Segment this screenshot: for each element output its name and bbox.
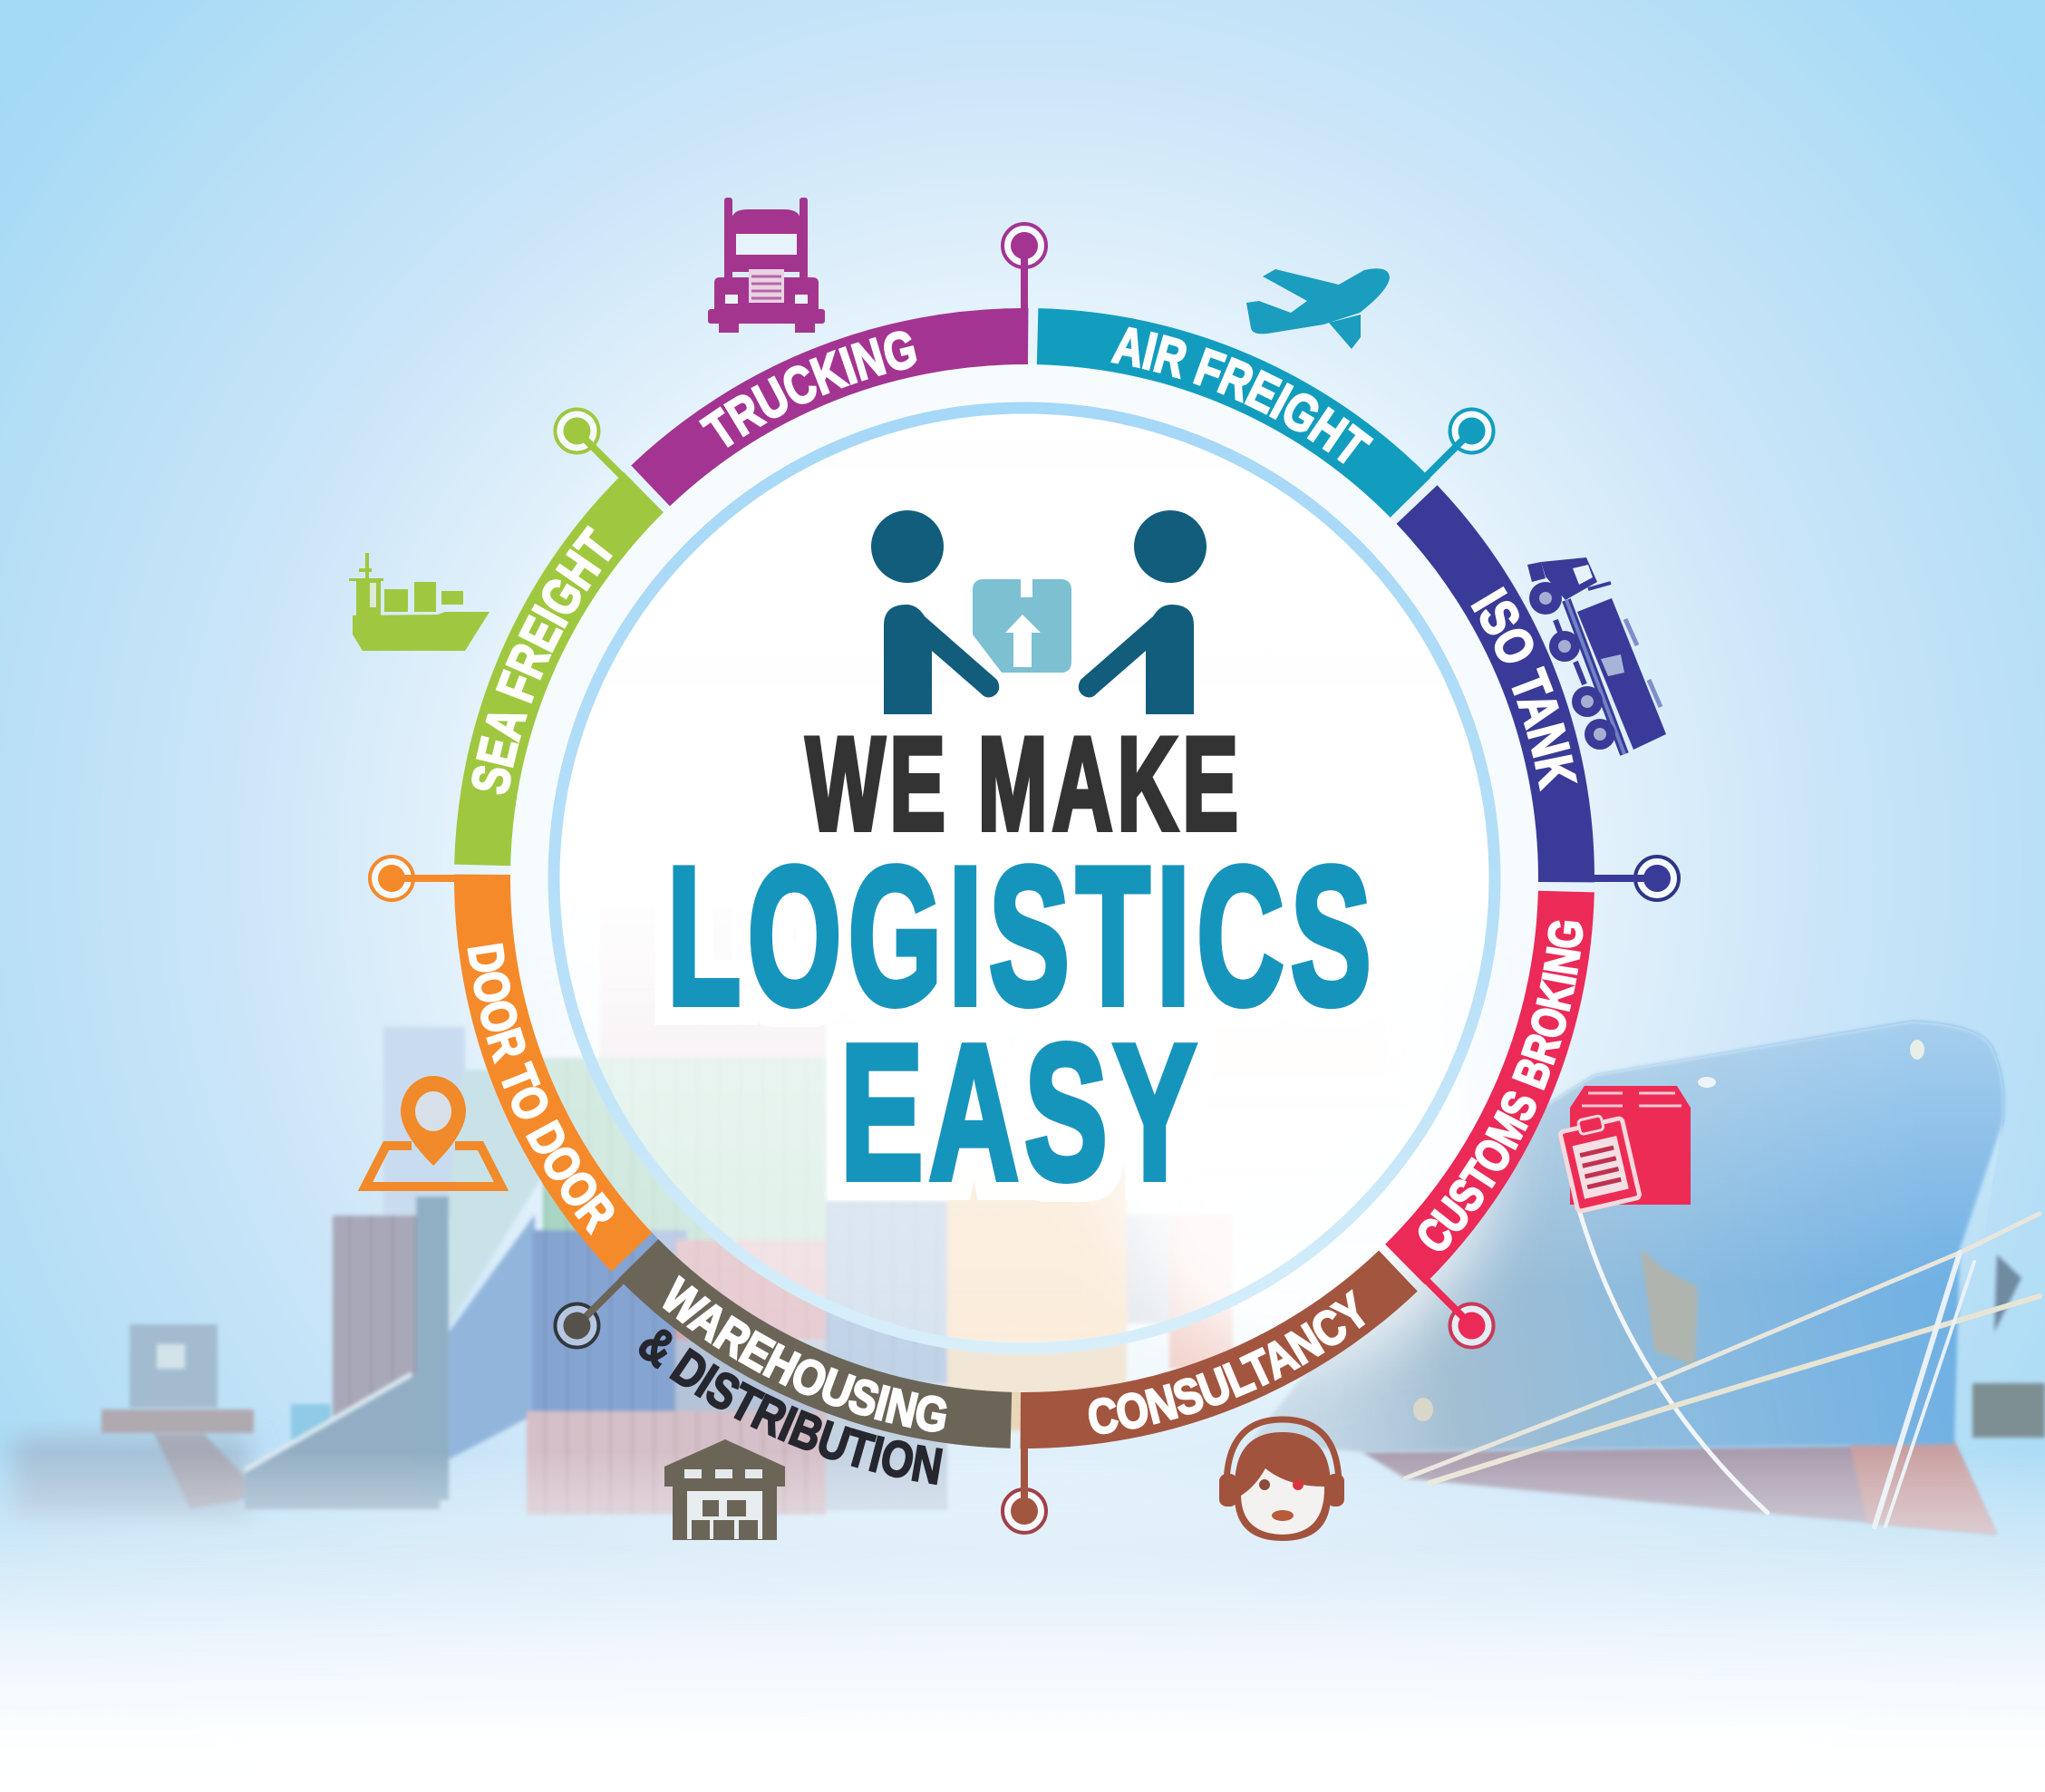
title: logistics: LOGISTICS [667, 826, 1378, 1045]
icon: warehouse [664, 1439, 785, 1540]
pin: sea freight [546, 400, 638, 492]
title: easy: EASY [840, 1004, 1202, 1219]
pin: customs broking [1410, 1264, 1503, 1357]
connector pins [370, 224, 1679, 1533]
segment: trucking [631, 190, 1056, 612]
pale glare beside the ring [1115, 943, 1496, 1360]
parcel [973, 579, 1071, 673]
icon: headset agent [1219, 1419, 1344, 1541]
pin: air freight [1410, 400, 1503, 492]
logo: two people handing a parcel [871, 510, 1207, 714]
segment: customs broking [1384, 888, 1594, 1287]
segment: iso tank [1291, 485, 1712, 910]
segment: sea freight [454, 470, 664, 868]
label: air freight: AIR FREIGHT [1110, 326, 1374, 464]
left person [871, 510, 999, 714]
segment: warehousing [615, 1238, 1014, 1448]
right person [1079, 510, 1207, 714]
icon: map pin [365, 1076, 501, 1187]
title: we make: WE MAKE [806, 710, 1243, 857]
label: door to door: DOOR TO DOOR [468, 943, 615, 1236]
segment: air freight [1034, 308, 1433, 518]
icon: airplane [1246, 268, 1390, 349]
pin: iso tank [1593, 857, 1679, 900]
icon: customs box and clipboard [1558, 1086, 1691, 1212]
segment labels [468, 326, 1583, 1485]
segment: consultancy [993, 1145, 1418, 1566]
icon: container ship [349, 553, 489, 651]
ship hull [1115, 943, 2045, 1535]
left machinery [14, 1324, 331, 1518]
pin: door to door [370, 857, 456, 900]
pin: consultancy [1003, 1447, 1046, 1533]
ring segments [328, 182, 1720, 1574]
pin: trucking [1003, 224, 1046, 310]
segment: door to door [336, 847, 758, 1272]
bottom white fade [0, 1450, 2045, 1792]
port photo backdrop [14, 906, 2045, 1535]
pin: warehousing [546, 1264, 638, 1357]
container stacks [245, 906, 1387, 1515]
mooring ropes [1405, 1210, 2040, 1526]
label: warehousing: WAREHOUSING [662, 1274, 947, 1432]
label: iso tank: ISO TANK [1470, 586, 1577, 792]
central disc [510, 364, 1538, 1392]
icon: truck [708, 198, 825, 333]
label: customs broking: CUSTOMS BROKING [1418, 921, 1583, 1251]
label: trucking: TRUCKING [698, 331, 917, 448]
label: consultancy: CONSULTANCY [1088, 1289, 1365, 1434]
icon: iso tank truck [1527, 557, 1666, 754]
label: sea freight: SEA FREIGHT [471, 525, 613, 794]
label: and distribution: & DISTRIBUTION [638, 1329, 943, 1485]
